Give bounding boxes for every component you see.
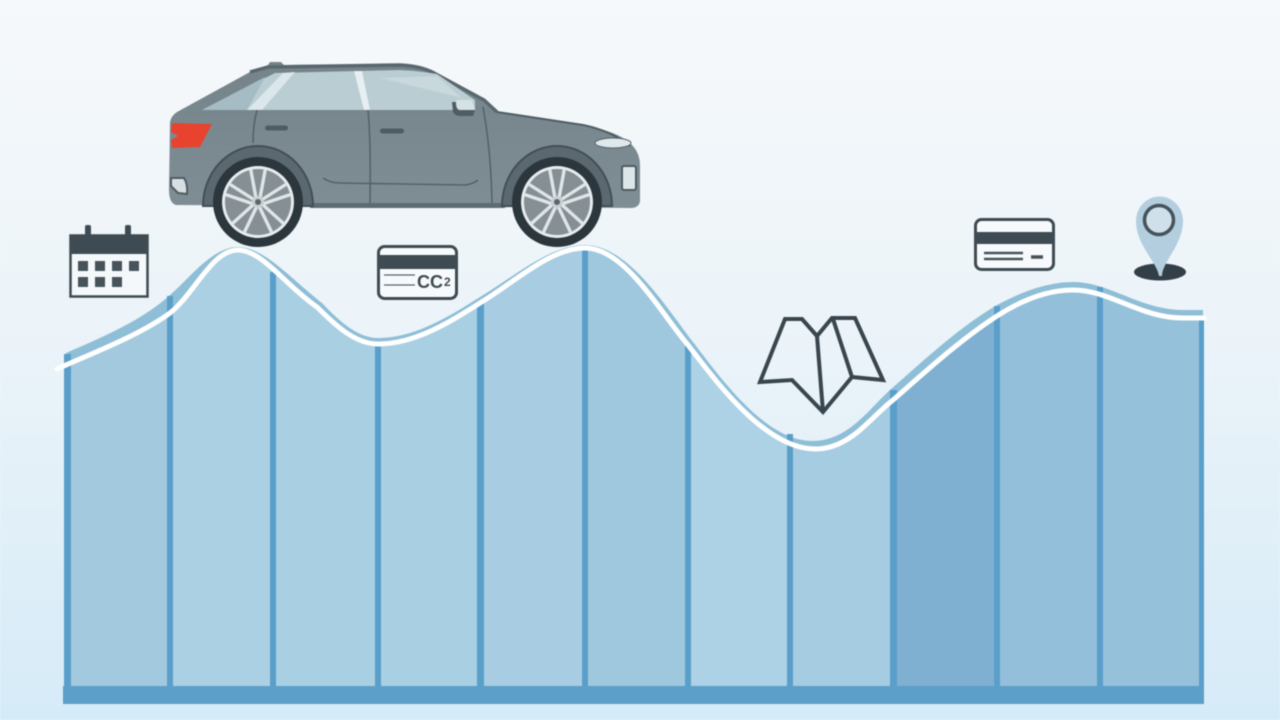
curve shadow band bbox=[66, 245, 1203, 700]
icon: credit card with CC bbox=[378, 246, 457, 298]
icon: credit card with CC: CC bbox=[417, 272, 443, 292]
rear reflector bbox=[171, 178, 187, 194]
lower sill bbox=[310, 203, 505, 208]
side windows bbox=[202, 70, 475, 110]
icon: car bbox=[169, 62, 640, 247]
baseline bar bbox=[63, 686, 1204, 704]
door lines bbox=[253, 107, 492, 204]
icon: credit card with CC: 2 bbox=[444, 275, 451, 289]
icon: location pin bbox=[1134, 196, 1186, 280]
roof rail bbox=[250, 65, 497, 112]
headlight bbox=[595, 138, 631, 148]
hood line bbox=[497, 112, 630, 146]
icon: calendar bbox=[70, 225, 148, 296]
white road line bbox=[57, 248, 1204, 449]
mirror bbox=[452, 102, 475, 116]
area columns bbox=[71, 250, 994, 686]
tail light bbox=[171, 123, 212, 148]
car body bbox=[169, 62, 640, 208]
rear window tint bbox=[202, 77, 265, 110]
front wheel bbox=[512, 157, 602, 247]
icon: map bbox=[760, 318, 883, 412]
chart: journey cost area bbox=[57, 240, 1204, 704]
window reflections bbox=[247, 72, 295, 110]
icon: credit card bbox=[975, 220, 1054, 270]
column dividers bbox=[64, 250, 1204, 688]
rear wheel bbox=[213, 157, 303, 247]
fog lamp bbox=[622, 166, 636, 190]
wheel arches bbox=[203, 146, 313, 206]
door handles bbox=[265, 126, 404, 134]
